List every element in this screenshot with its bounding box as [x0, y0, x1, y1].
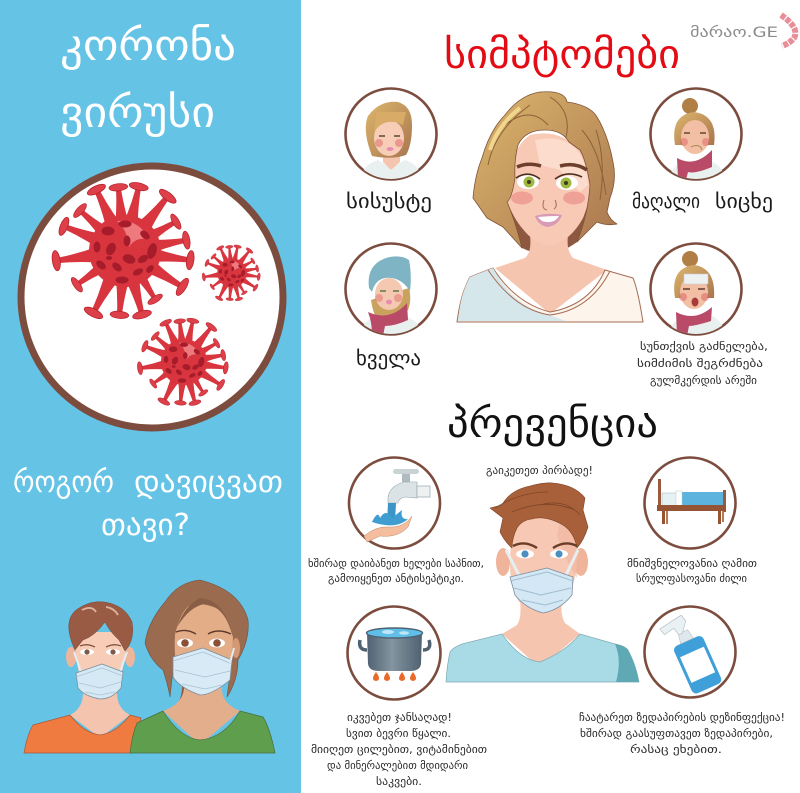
text: sleep: მნიშვნელოვანია ღამით [627, 557, 757, 570]
panel: left blue column [0, 0, 301, 793]
logo: marao.ge [690, 15, 795, 46]
text: disinfect surfaces: ხშირად გაასუფთავეთ ზედაპირები, [580, 727, 773, 740]
text: sleep: სრულფასოვანი ძილი [636, 572, 747, 585]
text: eat healthy: და მინერალებით მდიდარი [327, 759, 468, 772]
icon: logo foot arc [781, 15, 795, 46]
text: eat healthy [311, 711, 487, 788]
question heading [13, 465, 283, 543]
text: eat healthy: სვით ბევრი წყალი. [346, 727, 451, 740]
label: weakness: სისუსტე [346, 189, 432, 213]
prevention icon: spray bottle [644, 606, 736, 698]
text: eat healthy: იკვებეთ ჯანსაღად! [347, 711, 452, 724]
label: high fever: სიცხე [715, 189, 773, 213]
illustration: man with mask main [446, 483, 639, 682]
label: cough: ხველა [356, 346, 421, 370]
icon: large virus [50, 180, 196, 323]
text: eat healthy: საკვები. [376, 775, 422, 788]
question heading: როგორ [13, 465, 114, 500]
text: sleep [627, 557, 757, 585]
label: shortness of breath: სიმძიმის შეგრძნება [637, 357, 763, 370]
illustration: main woman [457, 92, 643, 322]
text: wash hands: ხშირად დაიბანეთ ხელები საპნით, [308, 557, 484, 570]
text: disinfect surfaces [579, 711, 785, 756]
symptom icon: cough [346, 244, 436, 336]
text: disinfect surfaces: რასაც ეხებით. [630, 743, 722, 756]
label: high fever: მაღალი [632, 189, 700, 213]
text: wash hands [308, 557, 484, 585]
title: corona virus: ვირუსი [60, 88, 215, 138]
logo: marao.ge: მარაო.GE [690, 24, 778, 41]
illustration: man with mask [24, 602, 141, 753]
icon: medium virus [136, 316, 229, 408]
label: high fever [632, 189, 773, 213]
heading: symptoms: სიმპტომები [444, 32, 680, 78]
icon: small virus [201, 244, 261, 303]
prevention icon: bed [644, 458, 736, 548]
illustration: woman with mask [130, 580, 275, 753]
title: corona virus [60, 21, 236, 138]
question heading: თავი? [101, 508, 190, 543]
text: eat healthy: მიიღეთ ცილებით, ვიტამინებით [311, 743, 487, 756]
symptom icon: shortness of breath [650, 244, 742, 336]
label: shortness of breath [637, 340, 768, 387]
virus circle [21, 166, 283, 428]
text: wear a mask: გაიკეთეთ პირბადე! [486, 464, 593, 477]
text: disinfect surfaces: ჩაატარეთ ზედაპირების დეზინფექცია! [579, 711, 785, 724]
symptom icon: weakness [346, 88, 436, 180]
prevention icon: boiling pot [348, 606, 440, 700]
heading: prevention: პრევენცია [447, 401, 658, 447]
text: wash hands: გამოიყენეთ ანტისეპტიკი. [328, 572, 464, 585]
prevention icon: hand washing [349, 458, 440, 548]
title: corona virus: კორონა [60, 21, 236, 71]
symptom icon: high fever [650, 88, 742, 180]
label: shortness of breath: სუნთქვის გაძნელება, [640, 340, 768, 353]
label: shortness of breath: გულმკერდის არეში [650, 374, 757, 387]
question heading: დავიცვათ [134, 465, 283, 500]
